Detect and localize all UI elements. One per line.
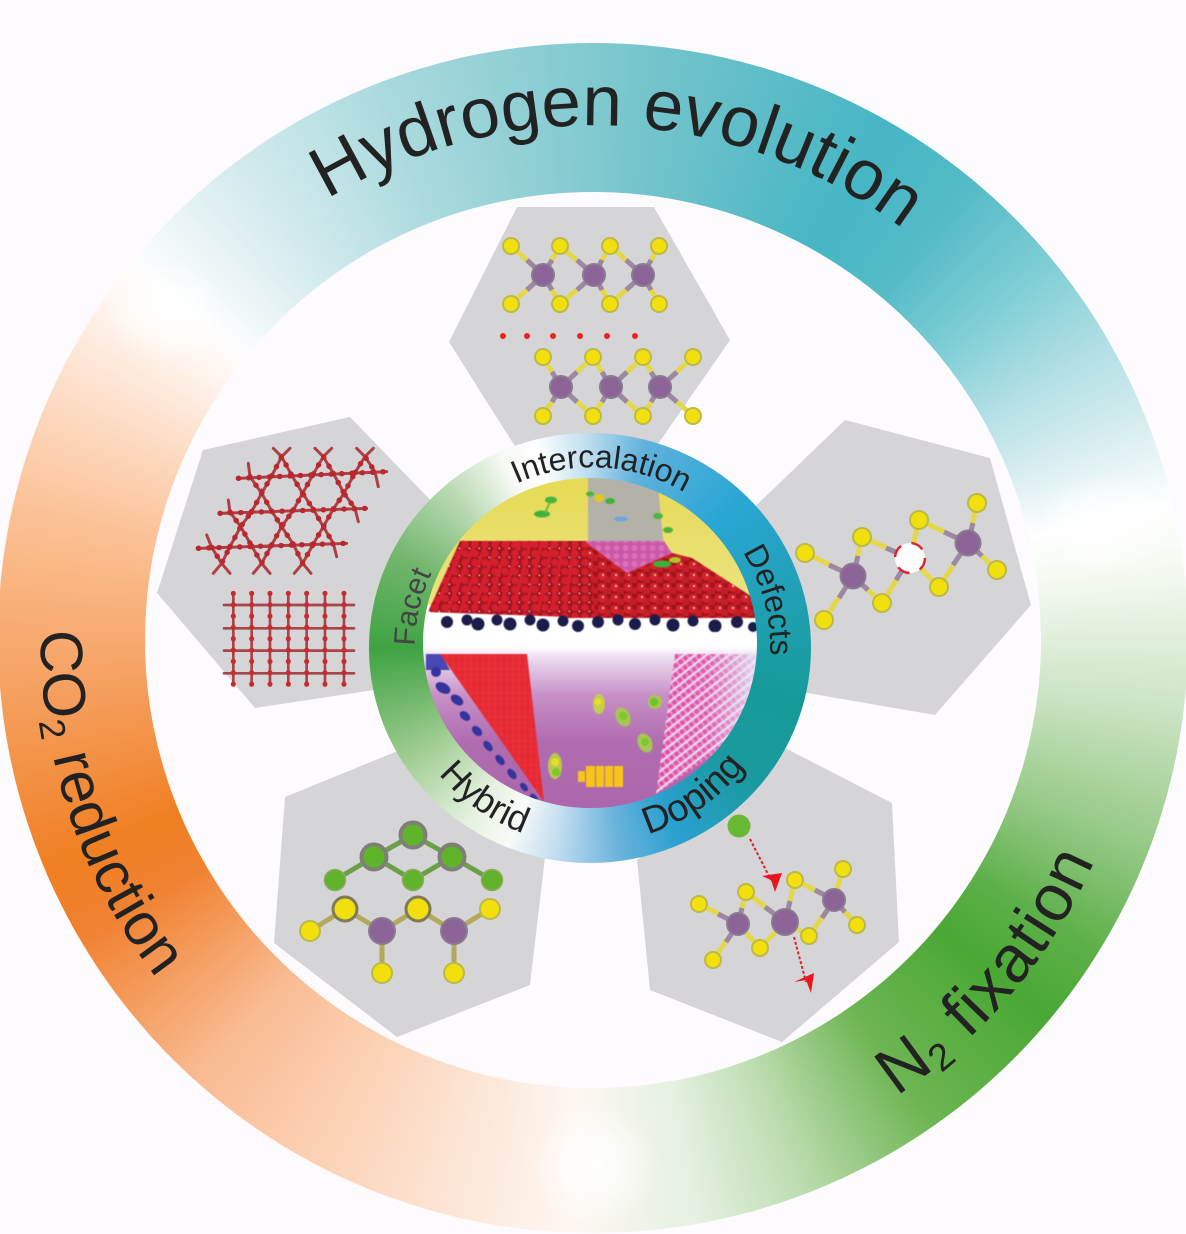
label: Hybrid: Hybrid [440,760,531,832]
white gap under slab [567,617,756,623]
heading: Hydrogen evolution: Hydrogen evolution [308,87,918,226]
yellow-green molecules [534,492,681,779]
blue atoms [426,654,540,804]
pink atom wall [656,654,760,794]
icon: green dopant atom [728,814,750,838]
molecule: green top layer [324,822,502,890]
lower purple zone [420,632,760,815]
red slab: stripes [434,541,575,612]
label: Facet: Facet [394,567,432,644]
molecule: upper MoS2 layer [503,238,667,312]
red triangle facet [440,654,544,802]
ring highlight spots [103,262,1175,1227]
gray backdrop [588,478,664,542]
heading: CO2 reduction: reduction [54,752,177,976]
central image [420,475,760,815]
yellow backdrop [420,475,760,605]
molecule: doped MoS2 [691,861,865,968]
panel: facet hexagon [157,417,440,708]
molecule: MoS2 bottom layer [300,897,500,983]
panel: hybrid hexagon [274,750,547,1037]
label: Defects: Defects [744,544,790,654]
lattice: kagome facet [198,448,387,573]
wall fade highlight [682,653,756,771]
intercalated red ions [500,333,638,339]
label: Doping: Doping [642,755,746,834]
central ring [369,433,811,863]
red slab: hex facet [560,541,757,622]
panel: intercalation hexagon [449,207,730,470]
panel: doping hexagon [637,748,899,1042]
label: Intercalation: Intercalation [510,446,689,492]
arrow: dopant entering [750,839,782,892]
heading: N2 fixation: 2 [929,1044,956,1072]
molecule: lower MoS2 layer [535,349,701,424]
pink atom patch [584,541,672,575]
navy atom row [441,614,758,632]
red slab: square facet [428,541,596,618]
inner white disc of the ring [145,192,1041,1088]
molecule: MoS2 with vacancy [796,494,1006,629]
lattice: square facet [224,593,354,685]
icon: yellow battery [578,766,623,787]
heading: N2 fixation: N [874,1034,931,1094]
heading: CO2 reduction: 2 [38,720,66,740]
vacancy site [895,543,925,573]
heading: CO2 reduction: CO [40,633,86,716]
heading: N2 fixation: fixation [942,853,1093,1036]
arrow: atom leaving [794,937,814,993]
panel: defects hexagon [740,420,1031,715]
